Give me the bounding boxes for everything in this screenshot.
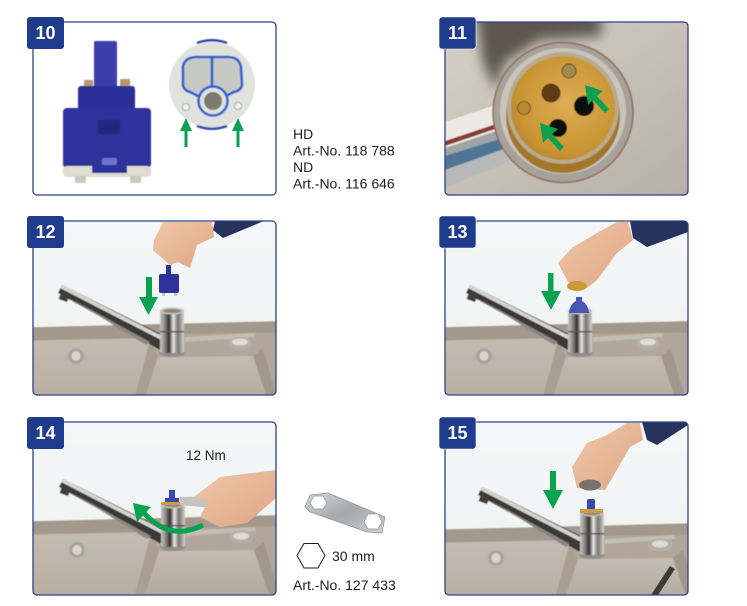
badge 15: 15	[447, 423, 468, 443]
panel 13: fit brass nut	[444, 220, 689, 396]
icon: tool in basin	[651, 566, 675, 595]
panel 10: cartridge views	[33, 22, 276, 195]
torque value: 12 Nm	[186, 448, 226, 463]
panel 11: valve body seat photo	[445, 10, 688, 195]
icon: cartridge spindle	[165, 490, 179, 503]
article numbers for cartridge: HD	[293, 126, 313, 142]
icon: hexagon size	[297, 544, 325, 568]
panel 14: tighten with spanner	[32, 421, 277, 596]
badge 13: 13	[447, 222, 468, 242]
icon: cartridge bottom view	[169, 40, 255, 129]
arrow: right mounting pin	[232, 118, 244, 147]
badge 14: 14	[35, 423, 56, 443]
badge 12	[27, 216, 64, 248]
arrow: insert down	[139, 277, 158, 315]
icon: cartridge in faucet	[569, 297, 589, 313]
icon: spindle and brass ring	[580, 499, 603, 513]
badge 10: 10	[35, 23, 56, 43]
icon: sleeve	[213, 221, 264, 238]
article numbers for cartridge: ND	[293, 159, 313, 175]
arrow: nut down	[541, 273, 561, 310]
badge 15	[439, 417, 476, 449]
icon: cartridge being inserted	[159, 265, 179, 296]
icon: spanner in hand	[180, 496, 208, 508]
arrow: upper port	[585, 85, 609, 113]
badge 12: 12	[35, 222, 56, 242]
icon: brass nut	[567, 281, 587, 291]
badge 13	[439, 216, 476, 248]
article numbers for cartridge: Art.-No. 116 646	[293, 176, 395, 192]
icon: hand with cap	[572, 423, 643, 490]
badge 11	[439, 17, 476, 49]
article numbers for cartridge: Art.-No. 118 788	[293, 142, 395, 158]
icon: brass ring	[161, 502, 180, 505]
icon: chrome cap	[579, 480, 601, 490]
icon: spanner	[305, 493, 385, 533]
arrow: tighten curve	[133, 503, 203, 531]
icon: cartridge side view	[63, 41, 151, 183]
arrow: cap down	[543, 471, 563, 509]
icon: sleeve	[630, 221, 688, 247]
badge 11: 11	[448, 23, 467, 43]
panel 15: fit cover cap	[444, 421, 689, 596]
icon: hand with brass nut	[558, 222, 633, 288]
icon: hand on spanner	[194, 470, 276, 527]
icon: hand holding cartridge	[153, 222, 214, 268]
icon: sleeve	[642, 422, 688, 445]
spanner size: 30 mm	[332, 548, 375, 564]
arrow: left mounting pin	[180, 118, 192, 147]
badge 14	[27, 417, 64, 449]
panel 12: insert cartridge	[32, 220, 277, 396]
arrow: lower port	[540, 123, 564, 151]
spanner article number: Art.-No. 127 433	[293, 577, 396, 593]
badge 10	[27, 17, 64, 49]
